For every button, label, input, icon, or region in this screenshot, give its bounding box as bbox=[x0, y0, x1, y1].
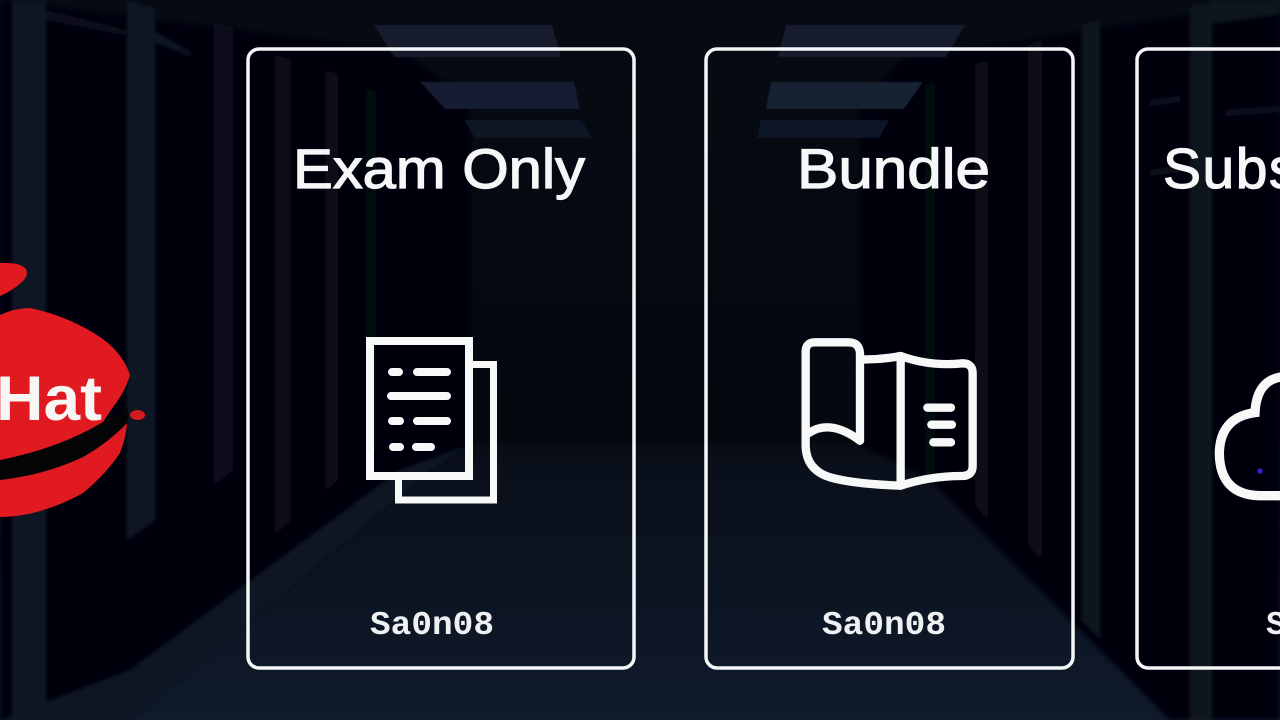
logo: red dot bbox=[130, 410, 145, 420]
icon: cloud bbox=[1219, 377, 1280, 496]
icon: open folded booklet bbox=[806, 342, 973, 486]
heading: Exam Only: Exam Only bbox=[293, 137, 585, 200]
logo: black band bbox=[0, 408, 128, 480]
logo: top brim fragment bbox=[0, 263, 27, 296]
heading: Bundle: Bundle bbox=[797, 137, 990, 200]
price: Sa0n08 bbox=[822, 607, 946, 644]
card outline bbox=[248, 49, 634, 668]
ceiling lights bbox=[374, 25, 965, 138]
panel: Bundle bbox=[706, 49, 1073, 668]
panel: Exam Only bbox=[248, 49, 634, 668]
panel: Subscription bbox=[1137, 49, 1280, 668]
card outline bbox=[1137, 49, 1280, 668]
card outline bbox=[706, 49, 1073, 668]
icon: purple status dot bbox=[1257, 468, 1263, 474]
right rack wall bbox=[860, 0, 1280, 720]
logo: hat crown bbox=[0, 308, 130, 460]
logo: Red Hat bbox=[0, 263, 145, 517]
logo: lower brim bbox=[0, 423, 127, 517]
price: Sa0n08 bbox=[370, 607, 494, 644]
icon: stacked documents bbox=[370, 341, 494, 500]
left rack wall bbox=[0, 0, 470, 720]
